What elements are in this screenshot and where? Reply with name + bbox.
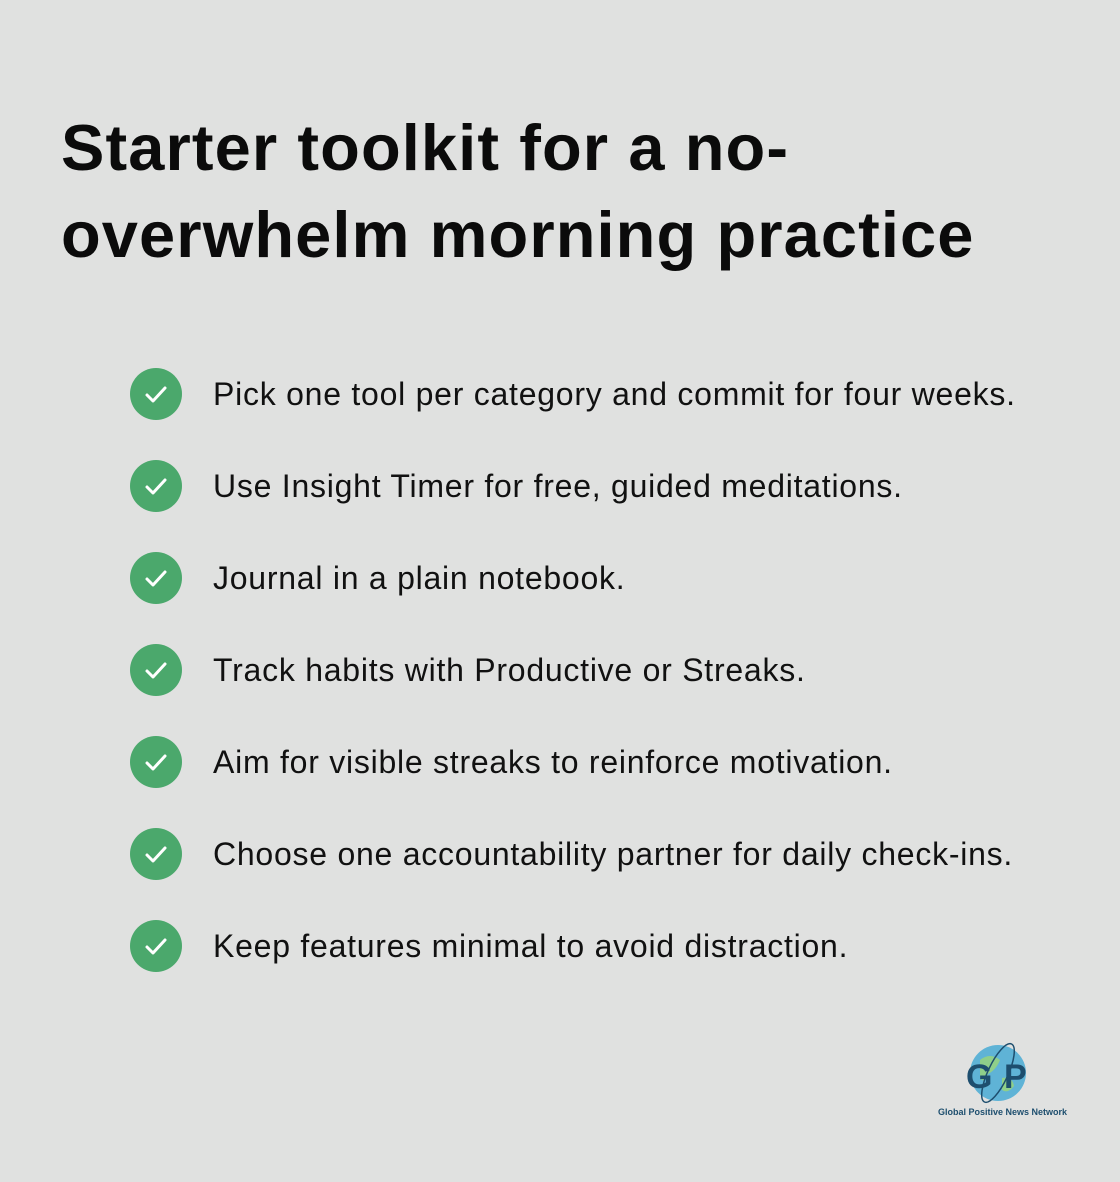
item 3 <box>130 552 625 604</box>
logo <box>938 1042 1068 1117</box>
item 2 <box>130 460 903 512</box>
item 7: Keep features minimal to avoid distraction. <box>213 928 848 964</box>
item 5 <box>130 736 893 788</box>
item 6: Choose one accountability partner for daily check-ins. <box>213 836 1013 872</box>
item 1: Pick one tool per category and commit for four weeks. <box>213 376 1016 412</box>
item 1 <box>130 368 1016 420</box>
title: overwhelm morning practice <box>61 198 975 271</box>
item 2: Use Insight Timer for free, guided meditations. <box>213 468 903 504</box>
title <box>61 111 975 271</box>
checklist <box>130 368 1016 972</box>
logo: Global Positive News Network <box>938 1107 1068 1117</box>
item 4 <box>130 644 806 696</box>
item 3: Journal in a plain notebook. <box>213 560 625 596</box>
item 5: Aim for visible streaks to reinforce motivation. <box>213 744 893 780</box>
title: Starter toolkit for a no- <box>61 111 789 184</box>
item 7 <box>130 920 848 972</box>
item 6 <box>130 828 1013 880</box>
logo: G <box>966 1058 992 1096</box>
logo: P <box>1004 1058 1027 1096</box>
item 4: Track habits with Productive or Streaks. <box>213 652 806 688</box>
